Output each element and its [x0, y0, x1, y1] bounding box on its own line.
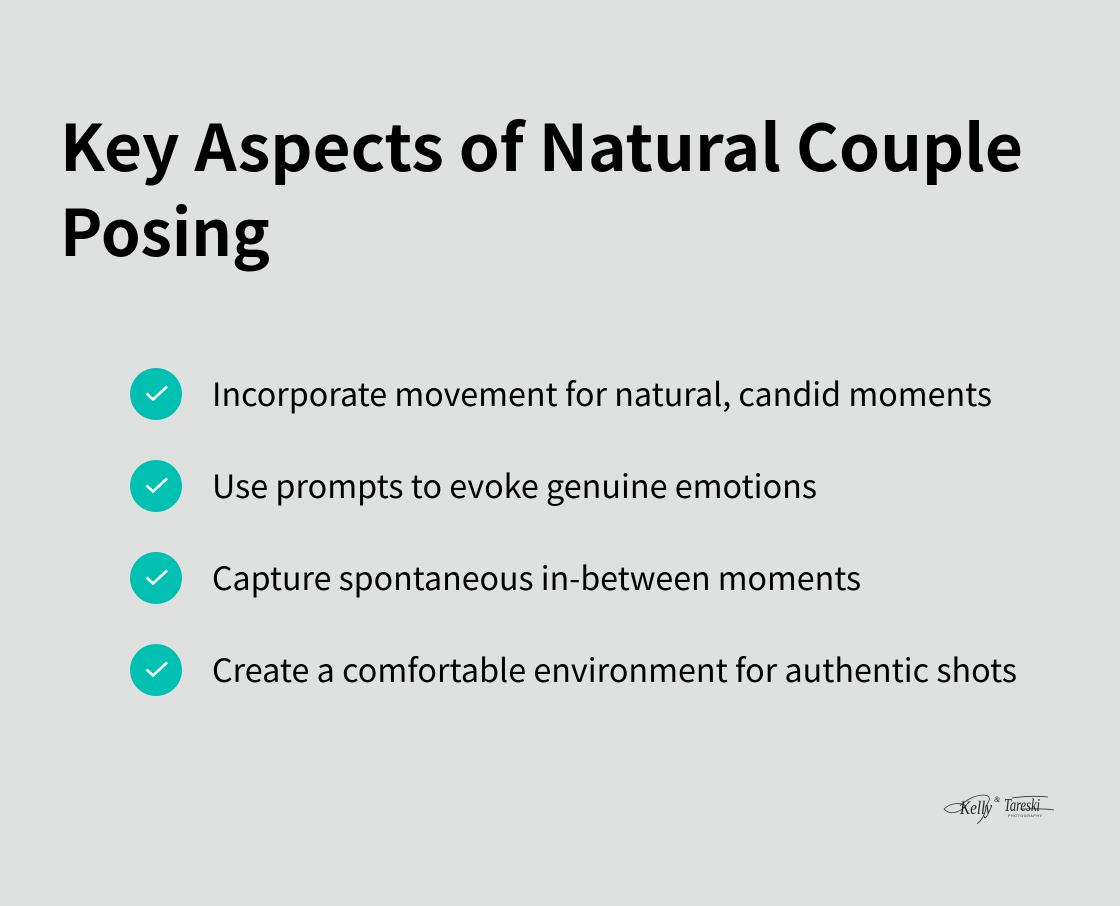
title: Posing — [60, 183, 270, 275]
signature logo: & — [994, 795, 1001, 804]
title — [60, 98, 1023, 275]
title: Key Aspects of Natural Couple — [60, 98, 1023, 190]
signature logo: Tareski — [1004, 795, 1040, 815]
item 4: Create a comfortable environment for authentic shots — [212, 646, 1017, 692]
item 2: Use prompts to evoke genuine emotions — [212, 462, 817, 508]
item 1: Incorporate movement for natural, candid moments — [212, 370, 992, 416]
item 3: Capture spontaneous in-between moments — [212, 554, 861, 600]
signature logo: Kelly — [959, 798, 992, 819]
signature logo: PHOTOGRAPHY — [1008, 814, 1043, 818]
signature logo — [944, 795, 1054, 824]
checklist — [130, 368, 1017, 696]
